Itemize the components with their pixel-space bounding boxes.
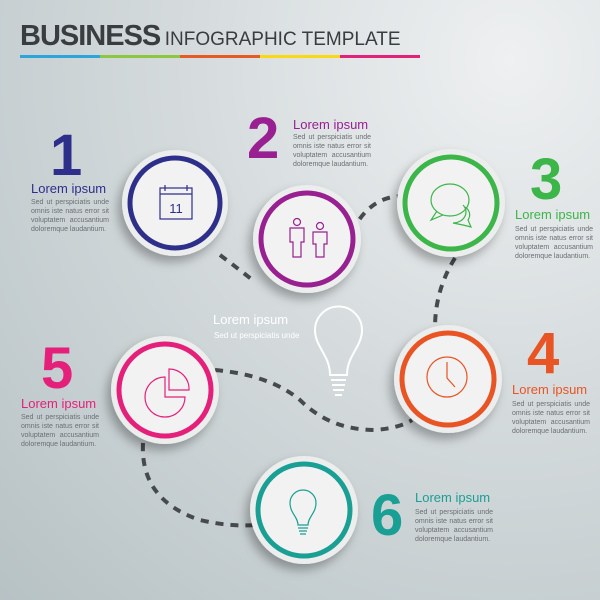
- step 2 text: [247, 106, 371, 171]
- text: Lorem ipsum: [31, 181, 106, 196]
- step 3 text: [515, 147, 593, 260]
- icon: pie chart: [145, 369, 189, 417]
- icon: people: [290, 218, 327, 257]
- step 1 text: [31, 123, 109, 233]
- text: Lorem ipsum: [415, 490, 490, 505]
- step 6 text: [371, 483, 493, 548]
- text: Sed ut perspiciatis unde omnis iste natus error sit voluptatem accusantium doloremque laudantium.: [515, 226, 593, 260]
- icon: clock: [427, 357, 467, 397]
- center callout: [213, 312, 299, 340]
- connector 1-2: [220, 255, 255, 282]
- circle 3: [397, 149, 505, 257]
- circle 5: [111, 336, 219, 444]
- text: Lorem ipsum: [512, 382, 587, 397]
- connector 5-4: [215, 370, 412, 430]
- title: BUSINESS INFOGRAPHIC TEMPLATE: [20, 20, 400, 52]
- color bar: [20, 55, 420, 58]
- text: Sed ut perspiciatis unde: [214, 331, 299, 340]
- circle 4: [394, 325, 502, 433]
- connector 3-4: [435, 258, 455, 328]
- text: 5: [41, 336, 73, 401]
- circle 6: [250, 456, 358, 564]
- text: 6: [371, 483, 403, 548]
- text: Sed ut perspiciatis unde omnis iste natus error sit voluptatem accusantium doloremque laudantium.: [293, 134, 371, 168]
- text: Lorem ipsum: [213, 312, 288, 327]
- text: 4: [527, 321, 559, 386]
- text: Lorem ipsum: [293, 117, 368, 132]
- icon: big bulb: [315, 307, 362, 395]
- text: Sed ut perspiciatis unde omnis iste natus error sit voluptatem accusantium doloremque laudantium.: [31, 199, 109, 233]
- text: Sed ut perspiciatis unde omnis iste natus error sit voluptatem accusantium doloremque laudantium.: [512, 401, 590, 435]
- circle 1: [122, 150, 228, 256]
- icon: bulb: [290, 490, 316, 534]
- text: Sed ut perspiciatis unde omnis iste natus error sit voluptatem accusantium doloremque laudantium.: [21, 414, 99, 448]
- step 4 text: [512, 321, 590, 435]
- text: 3: [530, 147, 562, 212]
- text: Lorem ipsum: [515, 207, 590, 222]
- text: 2: [247, 106, 279, 171]
- icon: speech: [431, 184, 471, 227]
- connector 5-6: [143, 443, 255, 525]
- icon: calendar: [160, 185, 192, 219]
- connector 2-3: [352, 196, 405, 232]
- step 5 text: [21, 336, 99, 448]
- text: 1: [50, 123, 82, 188]
- circle 2: [253, 185, 361, 293]
- text: Lorem ipsum: [21, 396, 96, 411]
- circle 1: 11: [169, 201, 183, 216]
- text: Sed ut perspiciatis unde omnis iste natus error sit voluptatem accusantium doloremque laudantium.: [415, 509, 493, 543]
